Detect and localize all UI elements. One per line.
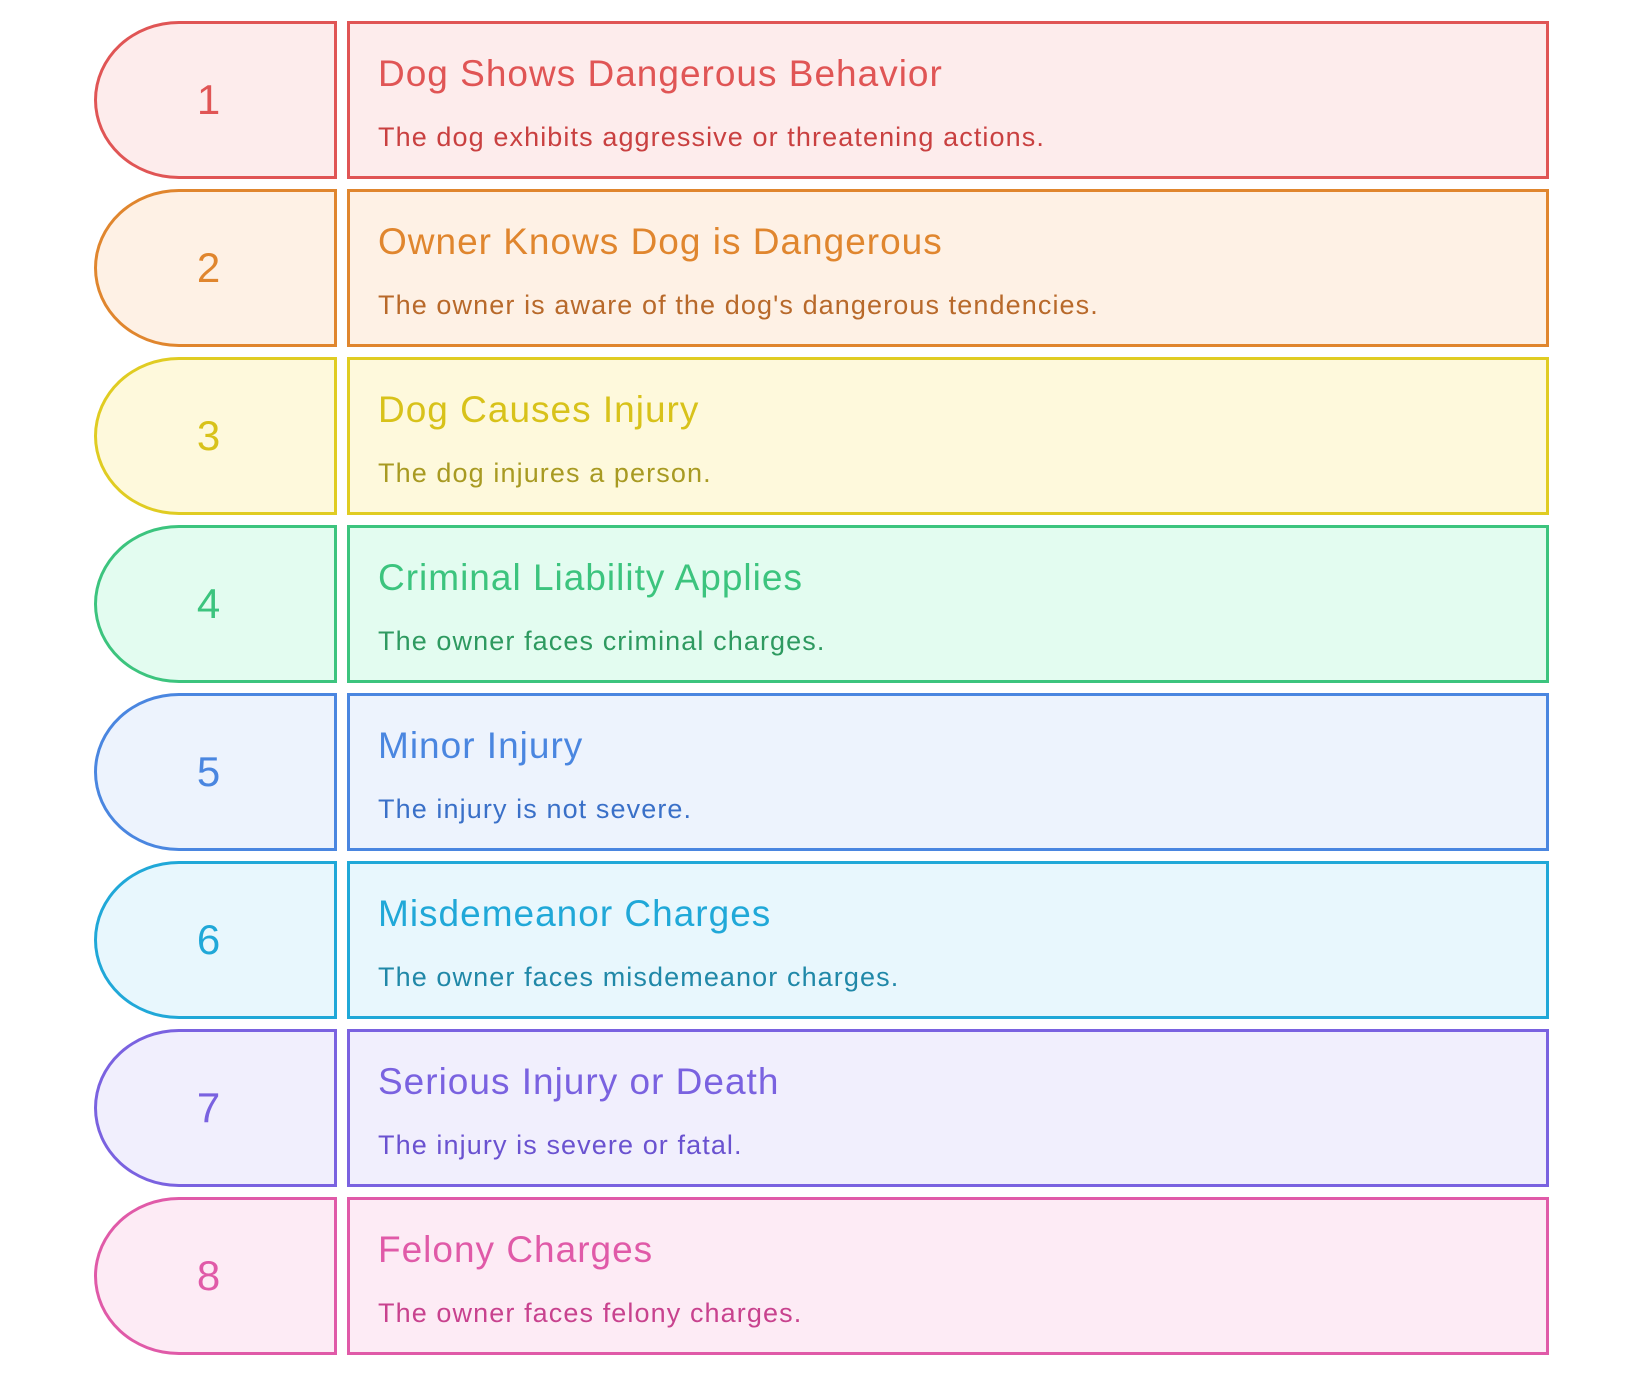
step 8 box: The owner faces felony charges. [378,1298,802,1328]
step 2 box: Owner Knows Dog is Dangerous [378,221,943,262]
number badge 5: 5 [197,748,220,795]
number badge 3 [94,357,337,515]
step 2 box: The owner is aware of the dog's dangerous tendencies. [378,290,1099,320]
step 1 box: Dog Shows Dangerous Behavior [378,53,943,94]
step 7 box [347,1029,1549,1187]
step 6 box: The owner faces misdemeanor charges. [378,962,899,992]
number badge 1 [94,21,337,179]
number badge 7: 7 [197,1084,220,1131]
step 4 box [347,525,1549,683]
step 3 box [347,357,1549,515]
row 4 [94,525,1549,683]
number badge 1: 1 [197,76,220,123]
number badge 5 [94,693,337,851]
row 6 [94,861,1549,1019]
step 8 box: Felony Charges [378,1229,653,1270]
row 3 [94,357,1549,515]
step 6 box: Misdemeanor Charges [378,893,771,934]
step 3 box: Dog Causes Injury [378,389,699,430]
step 4 box: Criminal Liability Applies [378,557,803,598]
step 5 box: Minor Injury [378,725,583,766]
step 4 box: The owner faces criminal charges. [378,626,825,656]
step 6 box [347,861,1549,1019]
step 1 box: The dog exhibits aggressive or threatening actions. [378,122,1045,152]
number badge 8: 8 [197,1252,220,1299]
row 7 [94,1029,1549,1187]
number badge 4 [94,525,337,683]
step 7 box: Serious Injury or Death [378,1061,779,1102]
row 1 [94,21,1549,179]
step 3 box: The dog injures a person. [378,458,712,488]
row 5 [94,693,1549,851]
number badge 6: 6 [197,916,220,963]
step 1 box [347,21,1549,179]
step 5 box [347,693,1549,851]
step 8 box [347,1197,1549,1355]
step 2 box [347,189,1549,347]
number badge 4: 4 [197,580,220,627]
number badge 3: 3 [197,412,220,459]
number badge 2: 2 [197,244,220,291]
step 5 box: The injury is not severe. [378,794,692,824]
number badge 7 [94,1029,337,1187]
row 8 [94,1197,1549,1355]
number badge 6 [94,861,337,1019]
row 2 [94,189,1549,347]
step 7 box: The injury is severe or fatal. [378,1130,743,1160]
number badge 2 [94,189,337,347]
number badge 8 [94,1197,337,1355]
